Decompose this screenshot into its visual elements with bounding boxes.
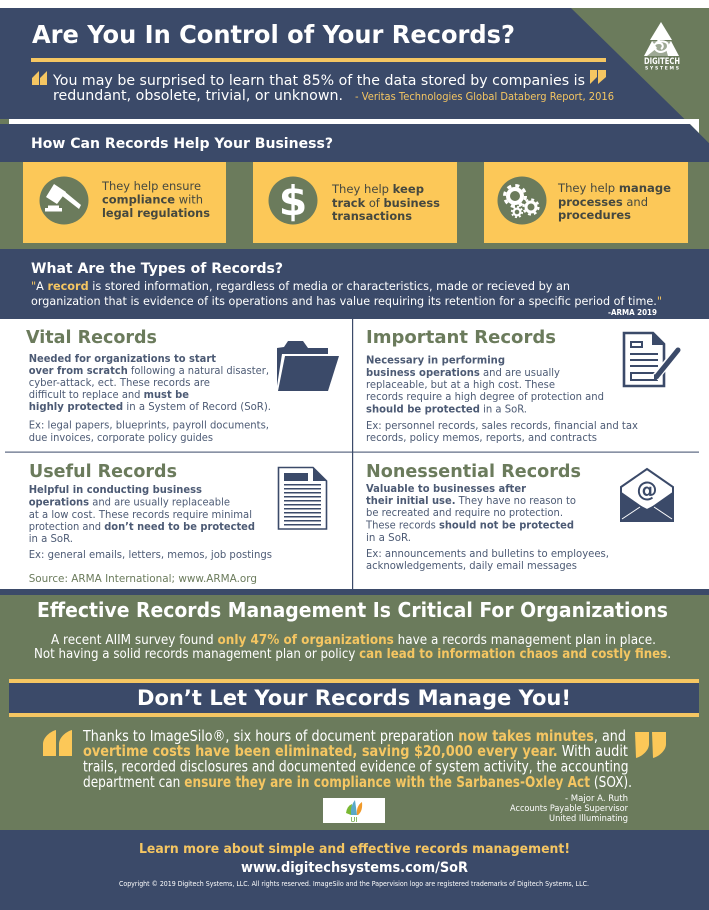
definition: organization that is evidence of its operations and has value requiring its retention for a specific period of time." [31, 294, 662, 308]
important records: Ex: personnel records, sales records, financial and tax [366, 420, 638, 432]
icon: envelope: @ [636, 478, 658, 502]
panel: record types [5, 319, 699, 589]
intro quote: - Veritas Technologies Global Databerg Report, 2016 [355, 91, 614, 103]
icon: document [278, 467, 327, 529]
logo: united illuminating: UI [350, 816, 358, 824]
important records: Important Records [366, 327, 556, 348]
important records: records require a high degree of protection and [366, 391, 604, 403]
attribution: United Illuminating [549, 814, 628, 824]
nonessential records: acknowledgements, daily email messages [366, 560, 577, 572]
icon: envelope [620, 469, 674, 522]
survey text [34, 633, 671, 662]
useful records: at a low cost. These records require minimal [29, 509, 252, 521]
vital records: Needed for organizations to start [29, 353, 216, 365]
useful records: Helpful in conducting business [29, 484, 202, 496]
panel: types of records intro [0, 249, 709, 319]
card text: legal regulations [102, 206, 210, 220]
card text: track of business [332, 196, 440, 210]
useful records: protection and don’t need to be protected [29, 521, 255, 533]
icon: closing quote [590, 70, 606, 84]
call to action: Learn more about simple and effective records management! [139, 841, 570, 857]
survey text: A recent AIIM survey found only 47% of organizations have a records management plan in place. [51, 633, 656, 648]
card: track transactions [253, 162, 457, 243]
icon: dollar sign: $ [279, 177, 307, 225]
icon: gears [504, 186, 538, 217]
panel: benefits [0, 162, 709, 249]
attribution: - Major A. Ruth [565, 794, 628, 804]
logo: united illuminating [323, 798, 385, 824]
vital records: Ex: legal papers, blueprints, payroll documents, [29, 420, 269, 432]
attribution: Accounts Payable Supervisor [510, 804, 628, 814]
nonessential records: Nonessential Records [366, 461, 581, 482]
useful records: Source: ARMA International; www.ARMA.org [29, 573, 257, 585]
vital records: Vital Records [26, 327, 157, 348]
heading: how can records help: How Can Records Help Your Business? [31, 136, 333, 152]
nonessential records: Valuable to businesses after [366, 483, 527, 495]
icon: folder [277, 341, 339, 391]
icon: digitech logo [644, 22, 680, 72]
important records: Necessary in performing [366, 354, 505, 366]
important records: records, policy memos, reports, and contracts [366, 432, 597, 444]
testimonial [82, 727, 632, 791]
nonessential records: be recreated and require no protection. [366, 507, 563, 519]
intro quote: You may be surprised to learn that 85% of the data stored by companies is [52, 73, 585, 89]
card text: transactions [332, 209, 412, 223]
icon: digitech logo: DIGITECH [644, 57, 680, 67]
testimonial: Thanks to ImageSilo®, six hours of document preparation now takes minutes, and [82, 727, 626, 745]
vital records: difficult to replace and must be [29, 389, 189, 401]
attribution [510, 794, 628, 824]
card text: They help ensure [101, 179, 201, 193]
vital records [26, 327, 271, 444]
card text: They help keep [331, 182, 424, 196]
icon: gavel [45, 184, 81, 212]
card: processes [484, 162, 688, 243]
useful records: Useful Records [29, 461, 177, 482]
card text [331, 182, 440, 223]
definition: "A record is stored information, regardless of media or characteristics, made or recieved by an [31, 279, 570, 293]
useful records: Ex: general emails, letters, memos, job postings [29, 549, 272, 561]
vital records: highly protected in a System of Record (SoR). [29, 401, 271, 413]
testimonial: department can ensure they are in compliance with the Sarbanes-Oxley Act (SOX). [83, 773, 632, 791]
url: www.digitechsystems.com/SoR [241, 860, 468, 876]
card text: They help manage [557, 181, 671, 195]
icon: document with pen [624, 332, 678, 386]
nonessential records: Ex: announcements and bulletins to employees, [366, 548, 609, 560]
important records: business operations and are usually [366, 367, 560, 379]
card text [557, 181, 671, 222]
banner: Don’t Let Your Records Manage You! [137, 686, 571, 710]
survey text: Not having a solid records management plan or policy can lead to information chaos and costly fines. [34, 647, 671, 662]
nonessential records: These records should not be protected [365, 520, 574, 532]
useful records: operations and are usually replaceable [29, 496, 230, 508]
copyright: Copyright © 2019 Digitech Systems, LLC. All rights reserved. ImageSilo and the Papervision logo are registered trademarks of Digitech Systems, LLC. [119, 880, 589, 888]
important records [366, 327, 638, 444]
definition [31, 279, 662, 317]
panel: footer [0, 830, 709, 910]
nonessential records [365, 461, 609, 572]
important records: replaceable, but at a high cost. These [366, 379, 555, 391]
intro quote [52, 73, 614, 104]
banner [9, 679, 699, 717]
vital records: due invoices, corporate policy guides [29, 432, 213, 444]
important records: should be protected in a SoR. [366, 404, 527, 416]
heading: effective records management: Effective Records Management Is Critical For Organizations [37, 598, 668, 622]
icon: large opening quote [43, 730, 72, 756]
testimonial: overtime costs have been eliminated, saving $20,000 every year. With audit [83, 742, 628, 760]
useful records: in a SoR. [29, 533, 73, 545]
definition: -ARMA 2019 [608, 308, 657, 317]
vital records: over from scratch following a natural disaster, [29, 365, 269, 377]
icon: large closing quote [635, 732, 666, 758]
card text: compliance with [102, 192, 203, 206]
panel: effective records management [0, 589, 709, 830]
icon: opening quote [32, 71, 47, 85]
card: compliance [23, 162, 226, 243]
card text: procedures [558, 208, 631, 222]
icon: digitech logo: SYSTEMS [645, 66, 679, 72]
vital records: cyber-attack, ect. These records are [29, 377, 210, 389]
useful records [29, 461, 272, 585]
title: Are You In Control of Your Records? [32, 20, 515, 49]
card text: processes and [558, 195, 648, 209]
card text [101, 179, 210, 220]
nonessential records: their initial use. They have no reason to [366, 495, 576, 507]
panel: header [0, 8, 709, 162]
intro quote: redundant, obsolete, trivial, or unknown. [53, 88, 343, 104]
heading: types of records: What Are the Types of Records? [31, 261, 283, 277]
nonessential records: in a SoR. [366, 532, 411, 544]
